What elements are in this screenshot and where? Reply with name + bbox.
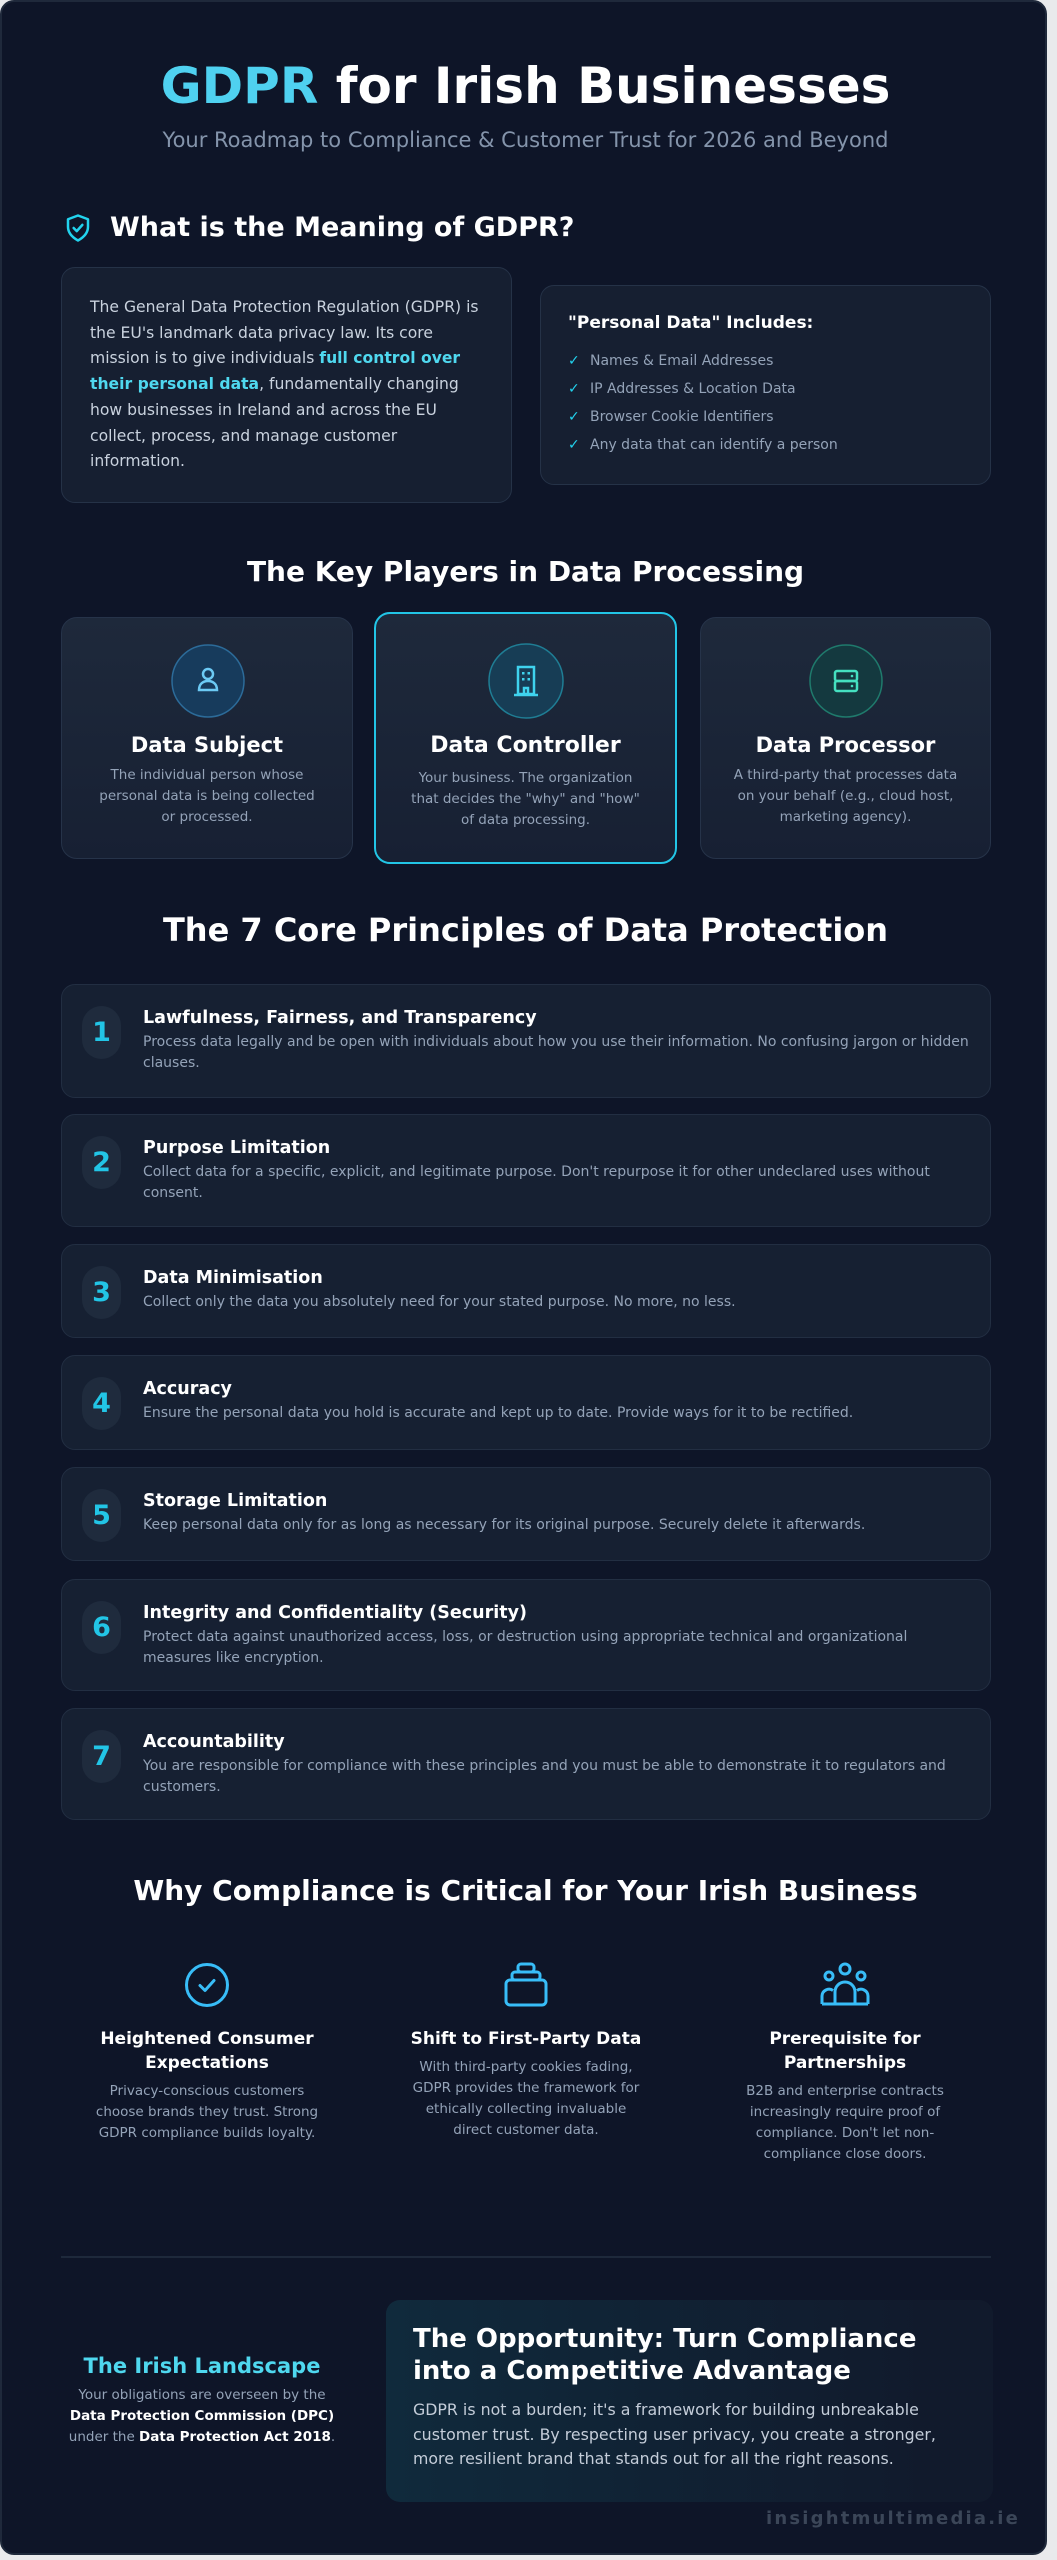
panel: GDPR definition: their personal data, fundamentally changing [90, 375, 459, 393]
panel: GDPR definition: collect, process, and manage customer [90, 427, 397, 445]
principle 6: Integrity and Confidentiality (Security) [143, 1603, 527, 1623]
principle 6: measures like encryption. [143, 1650, 324, 1666]
callout: opportunity [386, 2300, 993, 2502]
principle 2: consent. [143, 1185, 203, 1201]
list [568, 353, 838, 453]
text block: Irish landscape: Your obligations are overseen by the [78, 2387, 326, 2403]
column: partnerships: Prerequisite for Partnerships [769, 2029, 921, 2073]
principle 1: clauses. [143, 1055, 200, 1071]
column: consumer expectations: Privacy-conscious customers choose brands they trust. Strong GDPR compliance builds loyalty. [96, 2083, 318, 2141]
principle 5 [61, 1467, 991, 1561]
principle 4: 4 [92, 1388, 111, 1419]
principle 6 [61, 1579, 991, 1691]
watermark: insightmultimedia.ie [766, 2508, 1020, 2529]
principle 7: customers. [143, 1779, 221, 1795]
icon: server [809, 644, 883, 718]
text block: Irish landscape [69, 2354, 335, 2445]
panel: data processor: Data Processor [756, 733, 935, 757]
list: Browser Cookie Identifiers [590, 409, 774, 425]
title: GDPR for Irish Businesses [161, 57, 890, 115]
principle 7: Accountability [143, 1732, 285, 1752]
panel: data subject: Data Subject [131, 733, 283, 757]
list: ✓ [568, 409, 580, 425]
principle 5: 5 [92, 1500, 111, 1531]
list: ✓ [568, 437, 580, 453]
text block: Irish landscape: The Irish Landscape [84, 2354, 320, 2378]
principle 6: 6 [92, 1612, 111, 1643]
principle 4: Ensure the personal data you hold is accurate and kept up to date. Provide ways for it to be rectified. [143, 1405, 853, 1421]
list: Any data that can identify a person [590, 437, 838, 453]
principle 1: Process data legally and be open with individuals about how you use their information. No confusing jargon or hidden [143, 1034, 969, 1050]
callout: opportunity: customer trust. By respecting user privacy, you create a stronger, [413, 2424, 936, 2444]
panel: GDPR definition: mission is to give individuals full control over [90, 349, 460, 367]
heading: why compliance: Why Compliance is Critical for Your Irish Business [133, 1874, 918, 1907]
panel: data controller [374, 612, 677, 864]
icon: shield [66, 214, 90, 242]
list: ✓ [568, 353, 580, 369]
text block: Irish landscape: Data Protection Commission (DPC) [70, 2408, 334, 2424]
column: first-party data [411, 1962, 641, 2138]
panel: data processor [700, 617, 991, 859]
principle 3: Collect only the data you absolutely need for your stated purpose. No more, no less. [143, 1294, 736, 1310]
column: partnerships: B2B and enterprise contracts increasingly require proof of compliance. Don't let non-compliance close doors. [746, 2083, 944, 2162]
icon: stack [504, 1962, 548, 2006]
panel: GDPR definition: information. [90, 452, 185, 470]
list: IP Addresses & Location Data [590, 381, 796, 397]
column: partnerships [746, 1962, 944, 2162]
principle 2: 2 [92, 1147, 111, 1178]
callout: opportunity: The Opportunity: Turn Compliance into a Competitive Advantage [413, 2324, 916, 2386]
panel: GDPR definition: how businesses in Ireland and across the EU [90, 401, 437, 419]
principle 5: Keep personal data only for as long as necessary for its original purpose. Securely delete it afterwards. [143, 1517, 865, 1533]
principle 2: Purpose Limitation [143, 1138, 330, 1158]
principle 2: Collect data for a specific, explicit, and legitimate purpose. Don't repurpose it for other undeclared uses without [143, 1164, 930, 1180]
panel: GDPR definition: the EU's landmark data privacy law. Its core [90, 324, 433, 342]
section heading: meaning: What is the Meaning of GDPR? [110, 212, 574, 243]
column: first-party data: With third-party cookies fading, GDPR provides the framework for ethically collecting invaluable direct customer data. [413, 2059, 639, 2138]
icon: check circle [185, 1963, 229, 2007]
principle 7: 7 [92, 1741, 111, 1772]
panel: personal data includes [540, 285, 991, 485]
principle 3: 3 [92, 1277, 111, 1308]
column: consumer expectations [96, 1963, 318, 2141]
column: first-party data: Shift to First-Party Data [411, 2029, 641, 2049]
text block: Irish landscape: under the Data Protection Act 2018. [69, 2429, 335, 2445]
icon: building [488, 643, 564, 719]
panel: data controller: Your business. The organization that decides the "why" and "how" of data processing. [411, 770, 640, 828]
heading: key players: The Key Players in Data Processing [247, 555, 804, 588]
principle 5: Storage Limitation [143, 1491, 327, 1511]
principle 7: You are responsible for compliance with these principles and you must be able to demonstrate it to regulators and [143, 1758, 946, 1774]
principle 4 [61, 1355, 991, 1450]
principle 6: Protect data against unauthorized access, loss, or destruction using appropriate technical and organizational [143, 1629, 907, 1645]
principle 7 [61, 1708, 991, 1820]
principle 4: Accuracy [143, 1379, 232, 1399]
callout: opportunity: more resilient brand that stands out for all the right reasons. [413, 2449, 894, 2468]
panel: GDPR definition: The General Data Protection Regulation (GDPR) is [90, 298, 479, 316]
principle 3: Data Minimisation [143, 1268, 323, 1288]
principle 1: Lawfulness, Fairness, and Transparency [143, 1008, 537, 1028]
panel: data controller: Data Controller [430, 733, 621, 758]
heading: 7 principles: The 7 Core Principles of Data Protection [163, 911, 888, 949]
callout: opportunity: GDPR is not a burden; it's a framework for building unbreakable [413, 2400, 919, 2419]
panel: data subject: The individual person whose personal data is being collected or processed. [99, 767, 315, 825]
principle 2 [61, 1114, 991, 1227]
principle 1 [61, 984, 991, 1098]
panel: data processor: A third-party that processes data on your behalf (e.g., cloud host, marketing agency). [734, 767, 957, 825]
list: ✓ [568, 381, 580, 397]
principle 3 [61, 1244, 991, 1338]
list: Names & Email Addresses [590, 353, 773, 369]
icon: group [820, 1962, 870, 2006]
icon: person [171, 644, 245, 718]
panel: data subject [61, 617, 353, 859]
column: consumer expectations: Heightened Consumer Expectations [100, 2029, 314, 2073]
principle 1: 1 [92, 1017, 111, 1048]
subtitle: Your Roadmap to Compliance & Customer Trust for 2026 and Beyond [163, 128, 888, 152]
panel: GDPR definition [61, 267, 512, 503]
panel: personal data includes: "Personal Data" Includes: [568, 313, 813, 333]
